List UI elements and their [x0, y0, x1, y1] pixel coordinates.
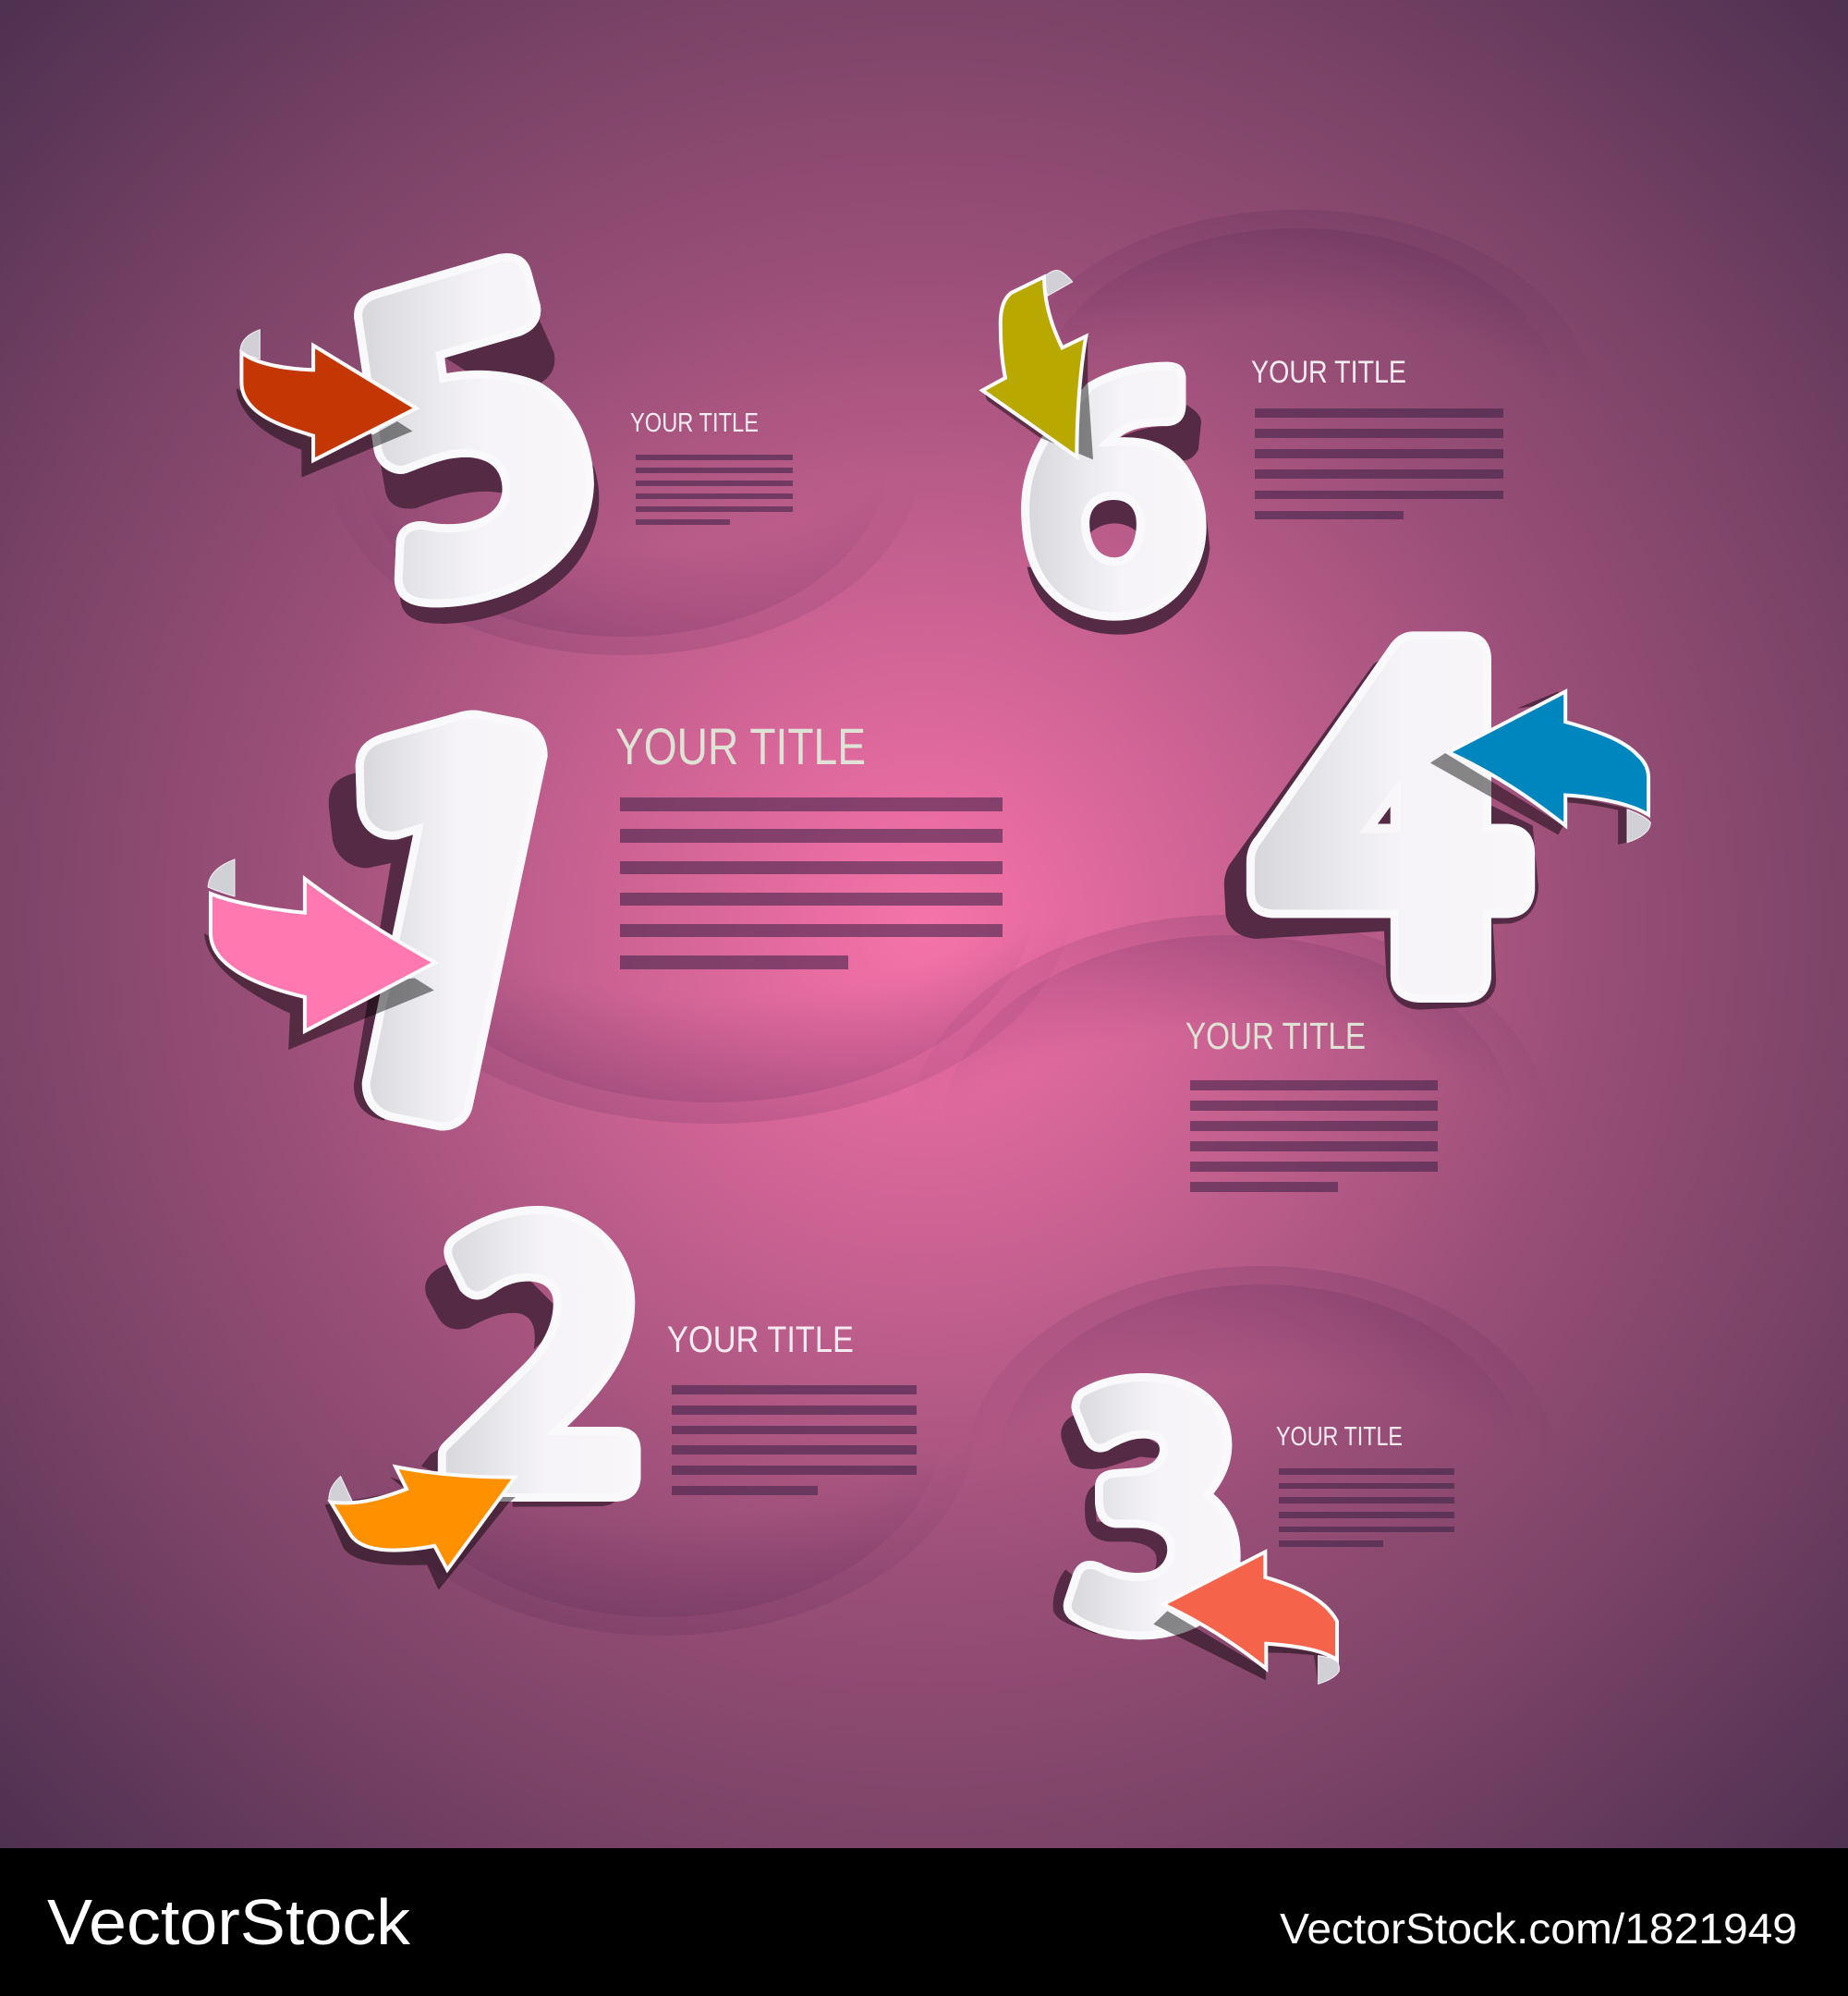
arrow: coral	[1153, 1555, 1339, 1684]
text lines	[1255, 408, 1503, 519]
title: YOUR TITLE	[667, 1320, 854, 1360]
title: YOUR TITLE	[630, 408, 759, 438]
digit 6 with shadow	[1021, 362, 1210, 635]
title: YOUR TITLE	[1185, 1015, 1366, 1057]
text lines	[1190, 1080, 1438, 1192]
title: YOUR TITLE	[1276, 1422, 1403, 1452]
text lines	[1279, 1468, 1454, 1547]
panel: step 2	[324, 1206, 917, 1590]
digit 5 with shadow	[354, 253, 599, 624]
footer bar	[0, 1848, 1848, 1996]
arrow: pink	[204, 859, 434, 1050]
panel: step 3	[1053, 1373, 1454, 1684]
text lines	[620, 797, 1003, 969]
panel: step 1	[204, 710, 1003, 1130]
title: YOUR TITLE	[615, 717, 866, 775]
panel: step 5	[237, 253, 793, 624]
digit 1 with shadow	[329, 710, 548, 1130]
text lines	[672, 1385, 917, 1495]
digit 3 with shadow	[1053, 1373, 1241, 1639]
arrow: olive	[984, 270, 1093, 459]
background ovals	[328, 210, 1594, 1673]
text lines	[636, 455, 793, 525]
title: YOUR TITLE	[1251, 355, 1406, 390]
digit 4 with shadow	[1224, 631, 1538, 1010]
footer brand: VectorStock	[47, 1886, 411, 1958]
digit 2 with shadow	[421, 1206, 641, 1507]
panel: step 6	[984, 270, 1503, 635]
footer url: VectorStock.com/1821949	[1280, 1905, 1797, 1953]
panel: step 4	[1185, 631, 1650, 1192]
arrow: blue	[1430, 691, 1650, 845]
arrow: orange	[324, 1469, 516, 1590]
arrow: red	[237, 330, 412, 478]
